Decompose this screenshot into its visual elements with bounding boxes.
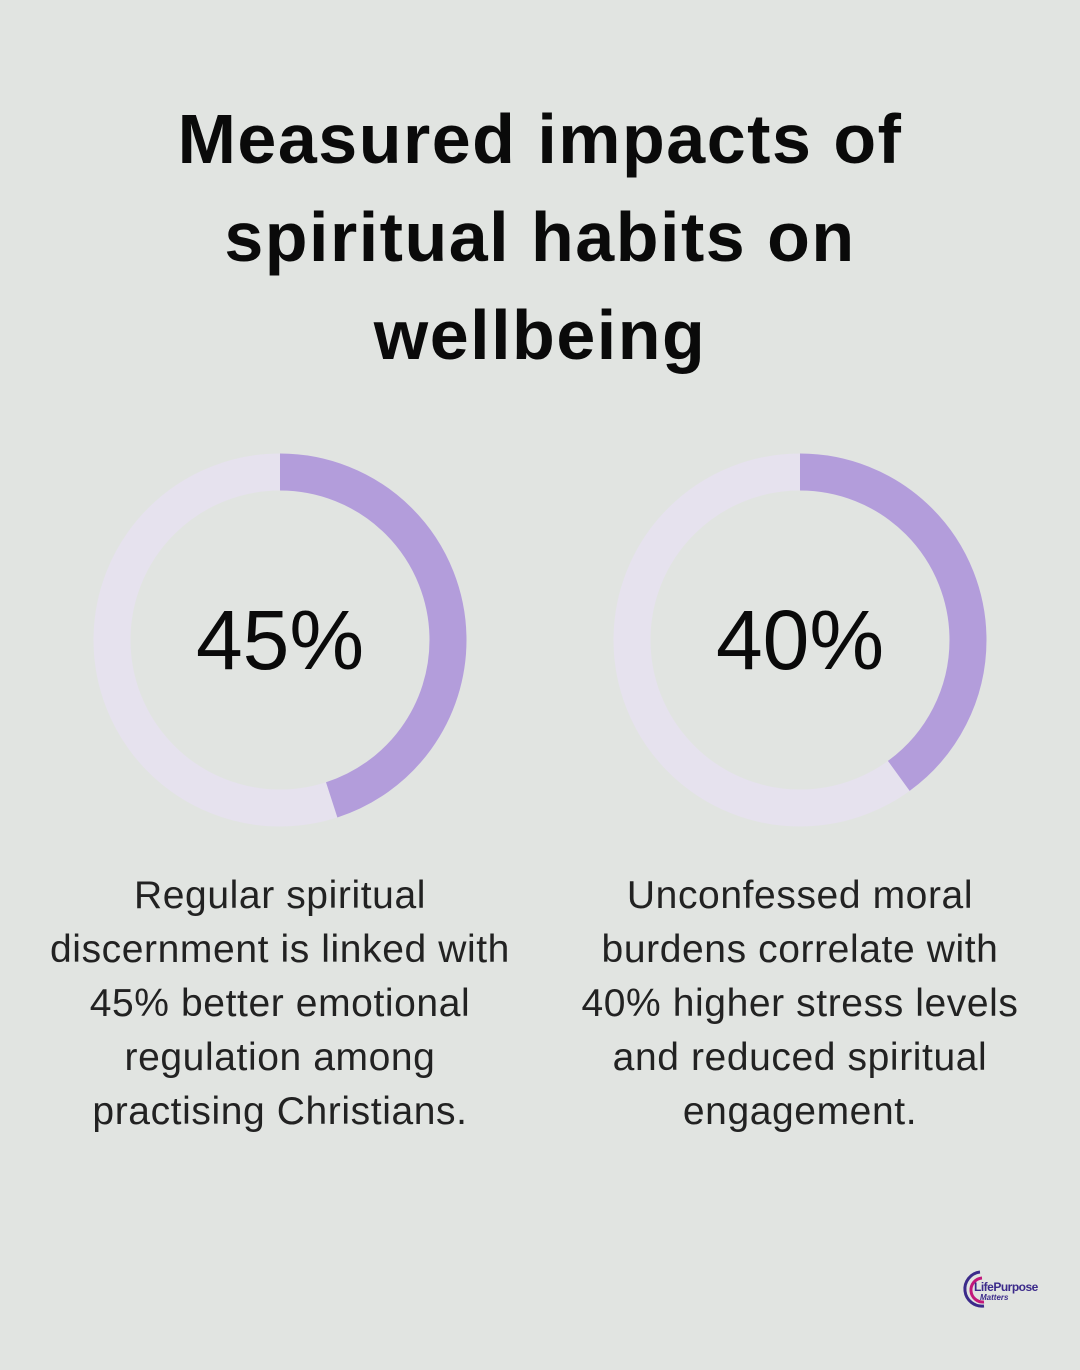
text: left description: practising Christians. xyxy=(92,1090,468,1133)
title: Measured impacts of xyxy=(178,100,902,178)
number: 40%: 40% xyxy=(716,593,884,687)
title: wellbeing xyxy=(374,296,706,374)
title: spiritual habits on xyxy=(224,198,856,276)
text: left description: discernment is linked with xyxy=(50,928,510,971)
logo: LifePurpose xyxy=(974,1280,1038,1294)
logo: Matters xyxy=(980,1293,1008,1302)
text: right description: burdens correlate with xyxy=(602,928,998,971)
number: 45%: 45% xyxy=(196,593,364,687)
panel: 40% ring xyxy=(614,454,986,826)
text: right description xyxy=(581,874,1019,1133)
text: right description: 40% higher stress levels xyxy=(581,982,1019,1025)
text: left description xyxy=(50,874,510,1133)
text: left description: regulation among xyxy=(124,1036,435,1079)
text: right description: Unconfessed moral xyxy=(627,874,973,917)
text: left description: 45% better emotional xyxy=(90,982,470,1025)
text: right description: engagement. xyxy=(683,1090,917,1133)
text: right description: and reduced spiritual xyxy=(613,1036,987,1079)
text: left description: Regular spiritual xyxy=(134,874,426,917)
title xyxy=(178,100,902,374)
panel: 45% ring xyxy=(94,454,466,826)
logo xyxy=(963,1270,1038,1308)
